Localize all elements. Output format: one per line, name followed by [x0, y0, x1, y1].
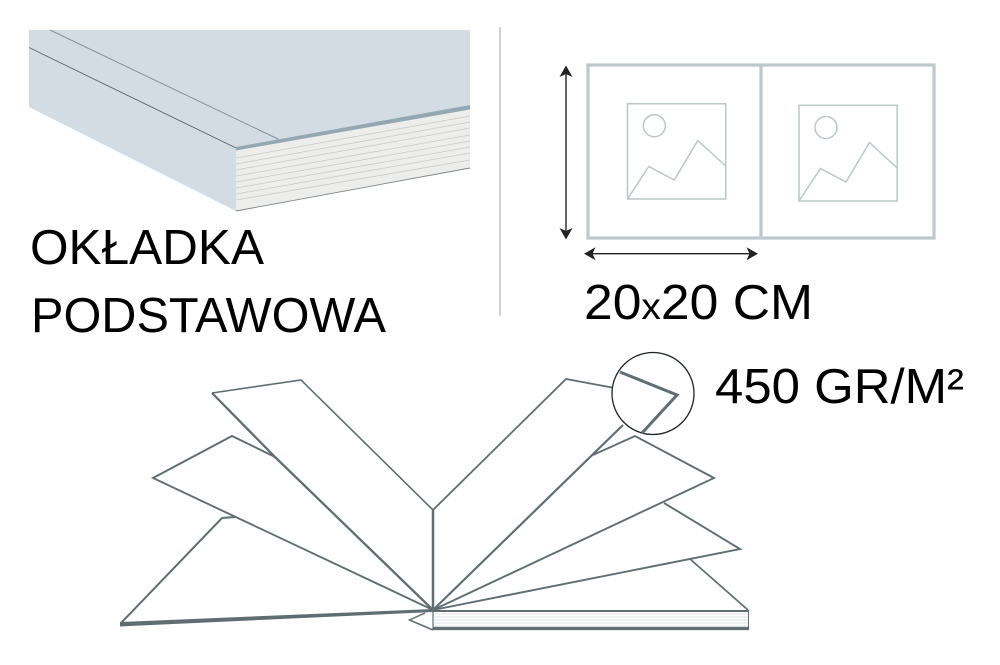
spine: [432, 510, 434, 610]
illustration: open book with fanned pages: [120, 379, 749, 630]
arrow: width dimension: [584, 247, 758, 260]
icon: right photo placeholder: [799, 105, 897, 201]
right pages: [433, 379, 748, 610]
heading: cover type: PODSTAWOWA: [31, 289, 386, 343]
callout: magnified page thickness: [612, 352, 694, 434]
page block: [410, 610, 749, 630]
heading: cover type: [30, 221, 386, 343]
arrow: height dimension: [560, 66, 572, 240]
label: paper weight: 450 GR/M²: [715, 360, 964, 414]
label: album size: 20x20 CM: [584, 276, 813, 330]
illustration: cover corner: [29, 30, 470, 211]
diagram: open album spread: [588, 65, 934, 238]
heading: cover type: OKŁADKA: [30, 221, 264, 275]
icon: left photo placeholder: [628, 104, 726, 199]
left pages: [120, 380, 433, 626]
